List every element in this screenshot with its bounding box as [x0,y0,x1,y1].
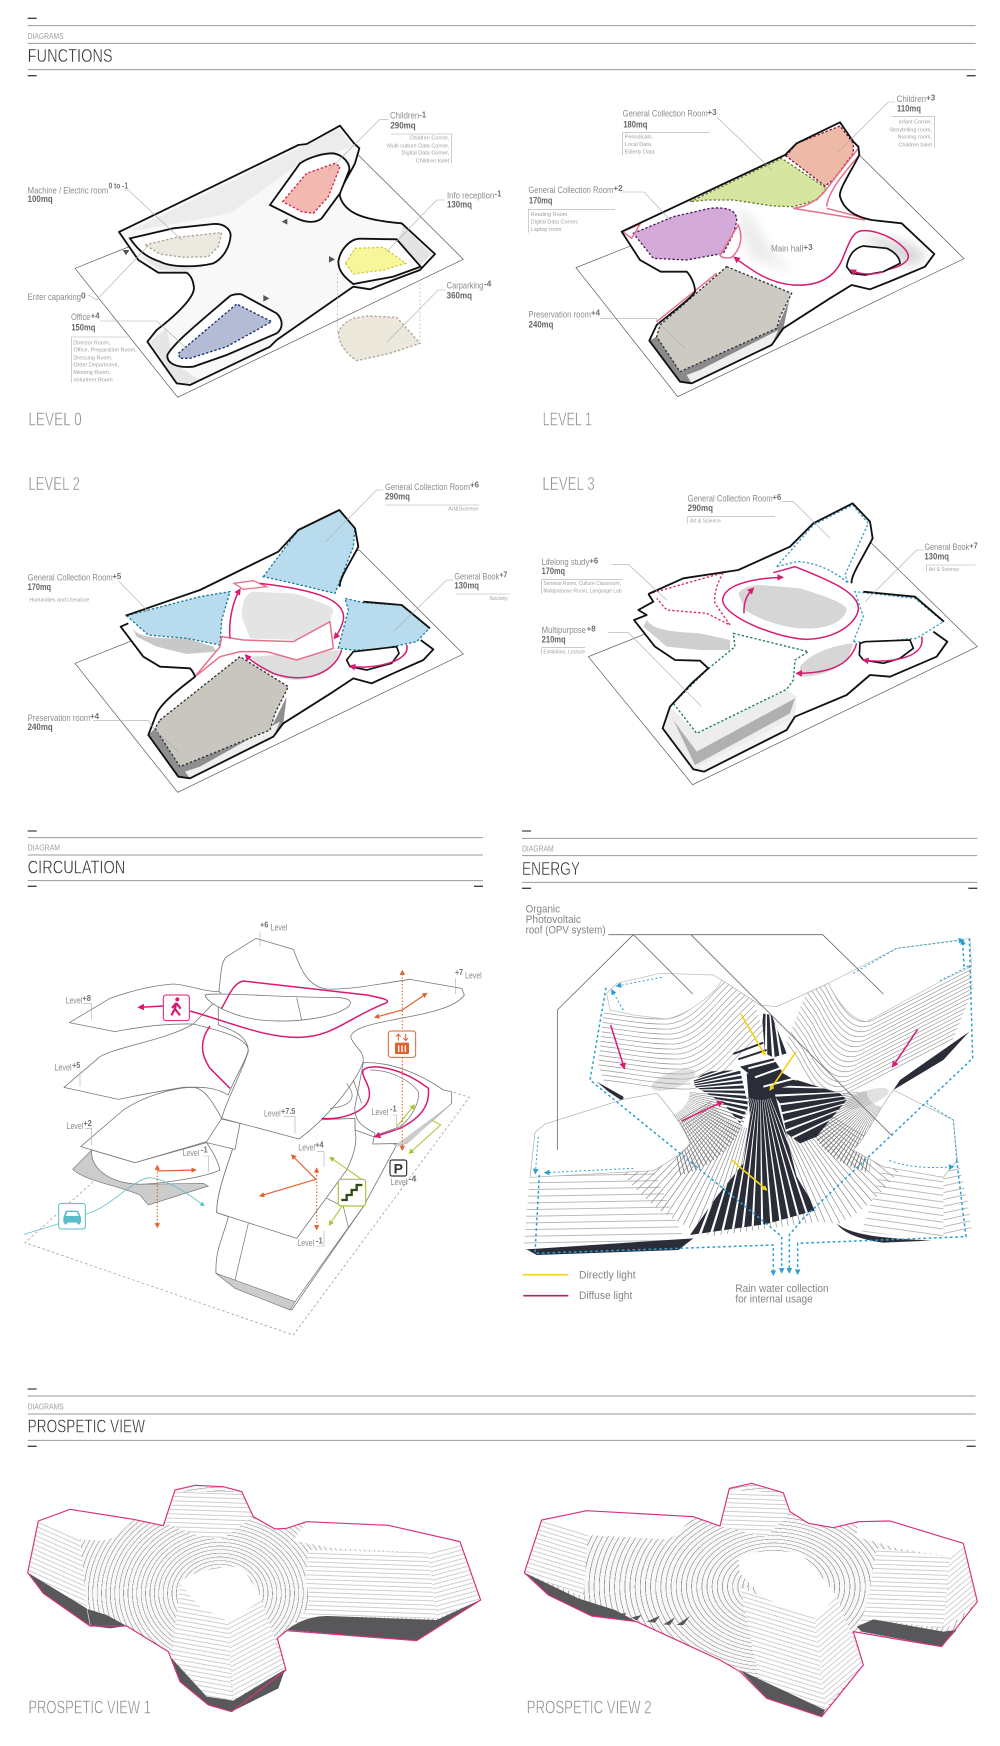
icon: parking [390,1160,407,1176]
label: office: Dressing Room, [73,355,113,361]
label: office: Director Room, [73,340,111,346]
label: general collection room +2: 170mq [529,195,552,205]
section: prospetic view [28,1389,977,1718]
label: children -1: 290mq [390,120,416,130]
level labels: Level [54,1062,72,1072]
label: general collection room +6 level 2: General Collection Room [385,482,470,492]
label: general collection room +2: Digital Data Corner, [531,220,579,226]
label: OPV roof: Photovoltaic [526,914,581,926]
OPV leader lines [557,935,892,1150]
section: functions [28,18,978,792]
level labels: +2 [83,1118,92,1128]
label: rain water collection [735,1283,829,1306]
label: carparking [387,279,492,342]
label: enter carparking: Enter caparking [28,292,81,302]
level labels: Level [67,1121,83,1131]
panel: level 0 plan [75,126,463,397]
label: general collection room +2: +2 [613,183,623,193]
legend: Diffuse light [579,1290,632,1302]
label: general collection room +5 [28,571,148,612]
label: general collection room +3: Elderly Data [625,149,655,155]
label: multipurpose: 210mq [542,634,566,644]
exploded level shapes [64,938,464,1310]
level labels: +7.5 [281,1106,296,1116]
label: carparking: Carparking [447,281,483,291]
level labels: Level [66,996,82,1006]
label: main hall: Main hall [771,244,803,254]
label: children +3: Children toilet [898,142,932,148]
panel: prospetic view 1 model [28,1485,481,1712]
label: machine electric room [28,180,182,240]
label: multipurpose: Exhibition, Lecture [543,649,585,655]
stair arrows [329,1105,441,1225]
legend [523,1269,636,1302]
label: general collection room +3: +3 [707,107,717,117]
label: multipurpose: +8 [587,623,596,633]
pedestrian route [190,981,429,1137]
label: carparking: -4 [484,279,492,289]
level labels: +4 [315,1140,324,1150]
label: children -1: Digital Data Corner, [401,151,450,157]
level labels: Level [465,970,482,980]
section: energy [520,831,983,1306]
label: multipurpose [542,623,702,707]
label: children -1: Multi culture Data Corner, [387,143,450,149]
panel: level 3 plan [588,503,977,785]
label: children -1: Children [390,111,419,121]
label: general collection room +6 level 2: 290mq [385,491,410,501]
label: lifelong study: 170mq [542,566,565,576]
label: lifelong study [542,555,667,600]
level labels: -1 [316,1235,323,1245]
level labels [54,920,482,1248]
label: preservation room level 1: 240mq [529,319,553,329]
label: info reception: -1 [495,189,502,199]
label: office: Meeting Room, [73,370,111,376]
functions section header [28,18,976,76]
label: office: Volunteer Room [73,378,113,384]
level labels: +6 [260,920,269,930]
label: enter carparking [28,247,147,302]
label: office: Office, Preparation Room, [73,348,137,354]
elevator arrows [157,971,427,1229]
label: lifelong study: Seminar Room, Culture Classroom, [543,581,621,587]
label: info reception: 130mq [447,200,472,210]
level labels: Level [391,1177,407,1187]
label: rain water collection: Rain water collection [735,1283,829,1295]
label: children +3: +3 [926,93,936,103]
label: general collection room +5: General Collection Room [28,573,113,583]
circulation header [28,831,483,886]
label: lifelong study: +6 [589,555,599,565]
label: general collection room +6 level 2 [325,480,479,542]
prospetic view header: PROSPETIC VIEW [28,1416,145,1437]
label: general book level 3: 130mq [924,551,949,561]
label: office [71,311,190,384]
icon: parking: P [394,1160,403,1176]
label: general collection room +5: +5 [112,571,122,581]
label: general book level 3: Art & Science [929,567,959,573]
label: children +3: Nursing room, [898,135,932,141]
heading: prospetic view 2: PROSPETIC VIEW 2 [527,1697,652,1718]
label: general collection room +3: Periodicals, [625,134,653,140]
label: machine electric room: 0 to -1 [109,180,128,190]
label: main hall: +3 [803,242,813,252]
icon: elevator [388,1031,416,1057]
label: general collection room +3: General Collection Room [623,109,708,119]
label: general collection room +5: Humanities and Literature [29,598,89,604]
heading: level 2: LEVEL 2 [28,473,80,494]
label: info reception: Info reception [447,191,494,201]
label: general book level 3: +7 [969,541,978,551]
direct light arrows [732,1014,796,1190]
label: general collection room +6 level 3: Art & Science [690,518,721,524]
label: general collection room +2: Reading Room, [531,212,569,218]
energy header: ENERGY [522,858,580,879]
label: general book level 2: +7 [499,569,508,579]
label: office: Office [71,312,90,322]
car route [24,1178,204,1234]
panel: level 1 plan [576,122,964,397]
label: general collection room +3: Local Data, [625,142,653,148]
label: office: 150mq [71,323,95,333]
panel: level 2 plan [75,510,463,792]
label: general book level 2: General Book [454,571,500,581]
heading: prospetic view 1: PROSPETIC VIEW 1 [28,1697,151,1718]
level labels: Level [372,1107,388,1117]
label: preservation room level 1 [528,308,685,348]
level labels: +5 [72,1060,81,1070]
label: children +3: Children [897,94,926,104]
label: general collection room +5: 170mq [28,582,51,592]
label: enter carparking: 0 [81,290,86,300]
heading: level 3: LEVEL 3 [542,473,595,494]
label: preservation room level 1: +4 [591,308,600,318]
label: preservation room level 2: Preservation room [28,713,90,723]
label: general collection room +2: Laptop room [531,227,562,233]
prospetic view header: DIAGRAMS [28,1402,64,1412]
icon: pedestrian [139,995,189,1021]
label: general collection room +6 level 2: +6 [470,480,479,490]
striped roof building [520,933,983,1260]
panel: prospetic view 2 model [524,1483,977,1717]
label: general collection room +2: General Collection Room [528,185,613,195]
label: preservation room level 1: Preservation room [528,309,591,319]
circulation header: CIRCULATION [28,856,125,877]
label: office: +4 [91,311,100,321]
label: general book level 2: 130mq [454,580,479,590]
label: preservation room level 2: 240mq [28,722,53,732]
label: children -1: Children toilet [416,158,450,164]
level labels: +8 [82,993,91,1003]
label: children -1 [328,109,452,171]
level labels: Level [183,1148,199,1158]
label: OPV roof: Organic [526,903,560,915]
label: lifelong study: Lifelong study [542,557,590,567]
icon: car [59,1203,85,1229]
label: general collection room +3 [623,107,772,170]
level labels: Level [298,1143,315,1153]
label: general collection room +6 level 3 [688,492,830,538]
level labels: Level [271,923,287,933]
energy header [522,831,977,888]
diffuse light arrows [611,1025,918,1121]
label: children -1: -1 [419,109,426,119]
label: general collection room +6 level 3: General Collection Room [688,494,773,504]
level labels: -1 [390,1104,397,1114]
label: OPV roof [526,903,606,937]
functions section header: DIAGRAMS [28,31,64,41]
label: office: Order Department, [73,363,120,369]
heading: level 0: LEVEL 0 [28,408,82,429]
level labels: Level [264,1109,281,1119]
label: machine electric room: 100mq [28,194,53,204]
label: children +3: Storytelling room, [889,127,932,133]
functions section header: FUNCTIONS [28,45,113,66]
dashed site boundary [25,1092,469,1335]
label: general collection room +6 level 2: Art&Science [448,507,478,513]
label: rain water collection: for internal usage [735,1294,813,1306]
label: general book level 3: General Book [924,542,970,552]
heading: level 1: LEVEL 1 [543,408,592,429]
label: multipurpose: Multipurpose [542,625,586,635]
label: preservation room level 2: +4 [90,711,99,721]
label: general collection room +6 level 3: 290mq [688,503,713,513]
label: children -1: Children Corner, [409,136,450,142]
rain water routes [535,938,973,1275]
label: children +3: 110mq [897,104,921,114]
label: children +3 [837,93,936,153]
level labels: -1 [201,1145,208,1155]
label: general book level 2: Society [489,596,508,602]
label: general collection room +3: 180mq [623,119,647,129]
label: lifelong study: Multipurpose Room, Language Lab [543,589,622,595]
label: preservation room level 2 [28,711,178,752]
energy header: DIAGRAM [522,844,554,854]
label: general book level 3 [865,541,978,602]
prospetic view header [28,1389,976,1446]
level labels: +7 [455,967,463,977]
label: carparking: 360mq [447,290,472,300]
label: general collection room +6 level 3: +6 [772,492,782,502]
level labels: -4 [408,1174,417,1184]
label: general book level 2 [393,569,510,632]
icon: stairs [338,1179,366,1206]
circulation header: DIAGRAM [28,843,60,853]
section: circulation [24,831,483,1335]
label: OPV roof: roof (OPV system) [526,925,606,937]
legend: Directly light [579,1269,636,1281]
label: general collection room +2 [528,183,672,233]
label: machine electric room: Machine / Electric room [28,185,108,195]
label: children +3: Infant Corner, [899,120,932,126]
label: info reception [387,189,502,252]
level labels: Level [297,1238,314,1248]
